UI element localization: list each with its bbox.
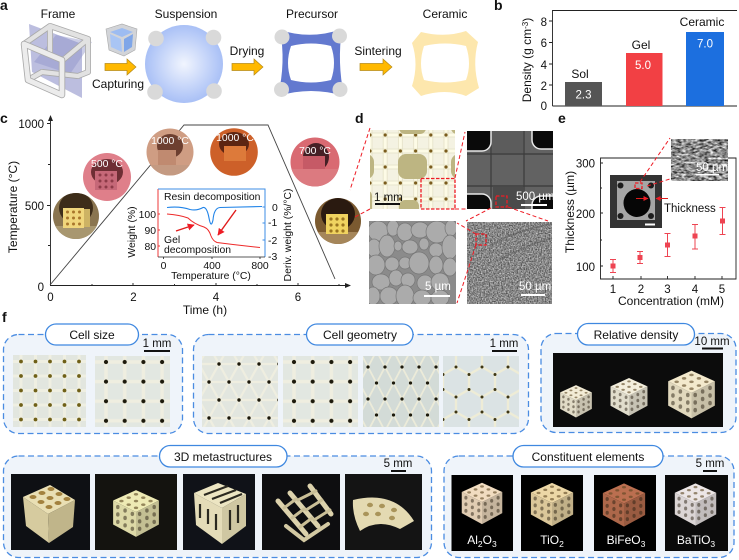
label: Capturing: Capturing: [92, 77, 144, 91]
inset bottom ticks: 800: [251, 261, 269, 272]
x tick labels: 4: [692, 284, 699, 296]
x tick labels: 4: [213, 292, 220, 304]
photo: BaTiO3: [665, 475, 728, 551]
photo: solid-wall cube: [11, 474, 90, 550]
panel label f: f: [2, 309, 7, 325]
red arrow: gel: [176, 225, 194, 231]
label: Ceramic: Ceramic: [423, 7, 467, 21]
icon: cube frame with planes: [24, 24, 92, 98]
inset right ticks: [268, 203, 278, 263]
inset: high-magnification SEM: 50 µm: [696, 162, 728, 174]
y axis ticks: [541, 17, 548, 113]
blue derivative curve: [167, 206, 262, 224]
photo: Al2O3: 3: [492, 539, 497, 549]
SEM image of cells: [467, 131, 553, 209]
photo: Al2O3: O: [483, 533, 492, 547]
y axis ticks: 0: [541, 101, 547, 113]
axes frame: [549, 10, 737, 106]
panel: Cell geometry: [194, 324, 528, 434]
inset right title: Deriv. weight (%/°C): [283, 189, 294, 281]
panel label d: d: [355, 110, 364, 126]
inset chart: TGA: [127, 189, 294, 282]
bar: Gel: [626, 38, 662, 106]
scale bar: 1 mm: [490, 338, 518, 350]
x tick labels: [610, 284, 725, 296]
photo: Al2O3: 2: [478, 539, 483, 549]
x tick labels: 0: [47, 292, 54, 304]
red weight curve: [167, 214, 260, 248]
scale bar 5 µm: 5 µm: [425, 281, 451, 293]
y tick labels: [18, 119, 44, 294]
heading pill: Constituent elements: [532, 450, 644, 464]
panel: Constituent elements: [444, 446, 734, 558]
red callouts: [635, 138, 670, 198]
photo: diamond: [363, 356, 439, 427]
photo: curved panel: [345, 474, 422, 550]
heading pill: [306, 324, 413, 345]
bar: Ceramic: Ceramic: [680, 15, 724, 29]
zoom box red small: [496, 196, 507, 207]
y axis title: -3: [521, 21, 530, 29]
label: Thickness: Thickness: [664, 203, 716, 215]
x tick labels: 1: [610, 284, 616, 296]
inset left ticks: [139, 210, 156, 253]
panel: 3D metastructures: [4, 446, 432, 558]
y axis ticks: 8: [541, 17, 547, 29]
zoom box red: [421, 178, 455, 209]
x tick labels: 5: [719, 284, 725, 296]
panel label c: c: [0, 110, 8, 126]
label: Suspension: Suspension: [155, 7, 217, 21]
photo: BiFeO3: 3: [641, 539, 646, 549]
label: Frame: Frame: [41, 7, 76, 21]
photo: 1000 °C dwell: 1000 °C: [216, 133, 254, 144]
photo: 700 °C: [290, 138, 340, 186]
x tick labels: 2: [130, 292, 137, 304]
heading pill: Cell size: [69, 328, 115, 342]
y tick labels: 300: [576, 158, 595, 170]
heading pill: 3D metastructures: [174, 450, 272, 464]
photo: Al2O3: Al: [467, 533, 478, 547]
scale bar 500 µm: 500 µm: [516, 191, 555, 203]
grains SEM: [366, 220, 458, 307]
axis arrowheads: [48, 115, 351, 288]
x tick labels: [47, 292, 301, 304]
photo: large cells: [95, 356, 170, 427]
inset left ticks: 80: [144, 242, 156, 253]
y tick labels: 200: [576, 209, 595, 221]
y axis title: ): [520, 18, 534, 22]
heading pill: [160, 446, 287, 467]
x axis title: Concentration (mM): [618, 294, 724, 308]
heading pill: [578, 324, 694, 345]
scale bar: 5 mm: [696, 458, 724, 470]
heading pill: Relative density: [594, 328, 678, 342]
bar: Sol: Sol: [571, 67, 589, 81]
icon: suspension sphere: [145, 25, 223, 103]
y axis title: Density (g cm: [520, 29, 534, 102]
y axis ticks: 4: [541, 60, 548, 72]
photo: 500 °C: [83, 153, 131, 201]
photo: BiFeO3: [594, 475, 656, 551]
y axis title: Temperature (°C): [6, 161, 20, 253]
inset: high-magnification SEM: [671, 139, 728, 181]
connecting dashes: [350, 128, 548, 303]
inset bottom ticks: [161, 261, 269, 272]
arrow: capturing: [105, 59, 136, 75]
axes: [47, 118, 348, 286]
bar: Gel: Gel: [632, 38, 650, 52]
y tick labels: 0: [38, 282, 44, 294]
arrow: sintering: [360, 59, 392, 75]
inset left title: Weight (%): [127, 206, 138, 258]
optical micrograph: [370, 130, 455, 209]
x axis title: Time (h): [183, 303, 227, 317]
y axis ticks: 2: [541, 81, 547, 93]
bar: Gel: 5.0: [635, 60, 651, 72]
icon: precursor shell: [274, 28, 348, 97]
y tick labels: 500: [25, 201, 44, 213]
photo: Al2O3: [452, 475, 513, 551]
y tick labels: 100: [576, 262, 595, 274]
scale bar 1 mm: 1 mm: [374, 192, 403, 204]
photo: 1000 °C dwell: [209, 127, 259, 177]
scale bar: 5 mm: [384, 458, 412, 470]
photo: room temperature: [53, 193, 99, 239]
photo: BaTiO3: BaTiO: [677, 533, 710, 547]
inset left ticks: 100: [139, 210, 156, 221]
photo: TiO2: 2: [559, 539, 564, 549]
data points with error bars: [610, 208, 726, 272]
inset axis titles: Temperature (°C): [171, 271, 251, 282]
bar: Sol: 2.3: [576, 90, 592, 102]
fine-grain SEM: [467, 222, 552, 304]
y tick labels: 1000: [18, 119, 44, 131]
scale bar: 10 mm: [694, 336, 730, 348]
photo: hexagon: [443, 356, 519, 427]
icon: ceramic shell: [412, 31, 479, 96]
y axis title: Thickness (µm): [563, 171, 577, 253]
photo: TiO2: [521, 475, 583, 551]
y axis ticks: 6: [541, 38, 547, 50]
panel e: thickness chart: [563, 138, 736, 308]
scale bar: 1 mm: [143, 338, 171, 350]
panel: Relative density: [541, 324, 736, 432]
label: Sintering: Sintering: [354, 44, 402, 58]
inset text: decomposition: decomposition: [164, 245, 231, 256]
photo: small cells: [13, 355, 86, 427]
photo: 1000 °C heating: [146, 128, 194, 176]
photo: three cubes: [553, 353, 723, 427]
label: Precursor: Precursor: [286, 7, 338, 21]
inset right ticks: -1: [268, 218, 277, 229]
inset bottom ticks: 0: [161, 261, 167, 272]
x tick labels: 2: [638, 284, 644, 296]
label: Drying: Drying: [230, 44, 264, 58]
panel c: sintering temperature profile: [6, 115, 362, 317]
photo: cooled sample: [314, 197, 362, 245]
panel: Cell size: [4, 324, 182, 434]
heading pill: Cell geometry: [323, 328, 397, 342]
photo: 1000 °C heating: 1000 °C: [151, 136, 189, 147]
photo: TiO2: TiO: [540, 533, 559, 547]
bar: Sol: [565, 67, 602, 106]
x tick labels: 3: [664, 284, 671, 296]
temperature curve: [50, 125, 335, 285]
scale bar 50 µm: 50 µm: [519, 281, 551, 293]
inset right ticks: 0: [272, 203, 278, 214]
icon: small captured cube: [106, 24, 137, 56]
inset: SEM frame cross-section: [610, 175, 662, 228]
inset text: gel: Gel: [164, 235, 180, 246]
panel label e: e: [558, 110, 566, 126]
photo: 500 °C: 500 °C: [91, 159, 123, 170]
inset text: Resin decomposition: [164, 192, 261, 203]
photo: BaTiO3: 3: [710, 539, 715, 549]
bar: Ceramic: 7.0: [697, 38, 713, 50]
inset right ticks: -2: [268, 236, 277, 247]
photo: triangular: [202, 356, 278, 427]
heading pill: [513, 446, 663, 467]
panel a: process schematic: [24, 7, 479, 103]
inset bottom ticks: 400: [203, 261, 221, 272]
inset left ticks: 90: [144, 226, 156, 237]
arrow: drying: [232, 59, 263, 75]
heading pill: [46, 324, 138, 345]
photo: square: [283, 356, 358, 427]
x tick labels: 6: [295, 292, 301, 304]
inset right ticks: -3: [268, 252, 277, 263]
photo: stacked lattice: [262, 474, 340, 550]
photo: BiFeO3: BiFeO: [607, 533, 641, 547]
photo: holed cube: [95, 474, 177, 550]
axes frame: [600, 158, 736, 279]
y tick labels: [576, 158, 595, 274]
photo: slotted cube: [183, 474, 255, 550]
zoom box red fine: [476, 234, 486, 245]
bar: Ceramic: [680, 15, 724, 106]
panel b: density bar chart: [520, 10, 737, 113]
panel d: microscopy images: [350, 128, 553, 304]
red arrow: resin: [218, 210, 236, 235]
photo: 700 °C: 700 °C: [299, 146, 331, 157]
